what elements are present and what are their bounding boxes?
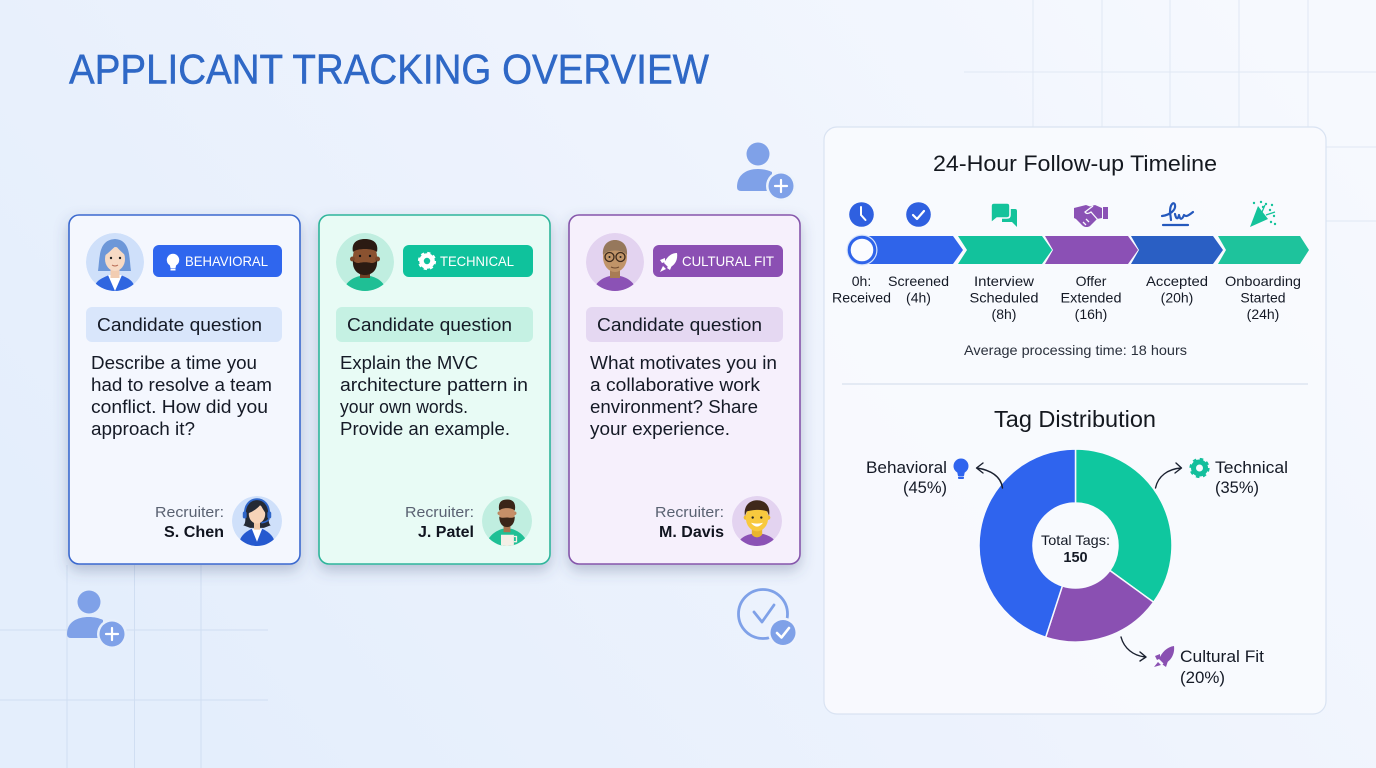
icon: check circle [738, 590, 798, 648]
title: APPLICANT TRACKING OVERVIEW [69, 46, 709, 92]
panel: technical card [319, 215, 550, 564]
tag: technical: TECHNICAL [440, 253, 514, 269]
panel: behavioral card [69, 215, 300, 564]
timeline labels: Started [1240, 290, 1286, 306]
avatar: behavioral candidate [86, 233, 144, 291]
question text: environment? Share [590, 396, 758, 417]
recruiter name: Recruiter: [405, 504, 474, 521]
timeline labels: Extended [1060, 290, 1122, 306]
timeline labels [832, 273, 1301, 322]
label: candidate question: Candidate question [597, 314, 762, 335]
question text: a collaborative work [590, 374, 761, 395]
icon: party popper [1250, 201, 1276, 227]
heading: tag distribution: Tag Distribution [994, 406, 1156, 432]
timeline labels: (8h) [992, 306, 1016, 322]
timeline labels: (16h) [1075, 306, 1107, 322]
avatar: cultural candidate [586, 233, 644, 291]
icon: bulb [167, 254, 179, 270]
tag: cultural fit [653, 245, 783, 277]
panel: right dashboard [824, 127, 1326, 714]
question text: architecture pattern in [340, 374, 528, 395]
label: cultural fit share: Cultural Fit [1180, 648, 1264, 666]
label: candidate question: Candidate question [97, 314, 262, 335]
label: candidate question [86, 307, 282, 342]
icon: add user top [737, 142, 796, 201]
donut centre total [1041, 532, 1110, 566]
timeline labels: Screened [888, 273, 949, 289]
avatar: J. Patel [482, 496, 532, 546]
heading: timeline: 24-Hour Follow-up Timeline [933, 151, 1217, 176]
timeline labels: Onboarding [1225, 273, 1301, 289]
arrow: technical [1156, 463, 1182, 488]
recruiter name: S. Chen [164, 524, 224, 541]
icon: handshake [1074, 205, 1108, 227]
recruiter name [655, 504, 724, 541]
label: candidate question: Candidate question [347, 314, 512, 335]
arrow: behavioral [976, 463, 1002, 488]
label: technical share: Technical [1215, 459, 1288, 477]
recruiter name: M. Davis [659, 524, 724, 541]
donut centre total: Total Tags: [1041, 532, 1110, 548]
timeline labels: (20h) [1161, 290, 1193, 306]
question text: your own words. [340, 396, 468, 417]
question text: your experience. [590, 418, 730, 439]
question text: had to resolve a team [91, 374, 272, 395]
label: behavioral share [866, 458, 968, 497]
label: technical share: (35%) [1215, 479, 1259, 497]
label: behavioral share: Behavioral [866, 459, 947, 477]
tag: behavioral [153, 245, 282, 277]
icon: clock [849, 202, 874, 227]
timeline labels: (4h) [906, 290, 931, 306]
donut centre total: 150 [1063, 550, 1088, 566]
timeline labels: (24h) [1247, 306, 1279, 322]
icon: signature [1162, 203, 1193, 225]
timeline arrow track [846, 234, 1309, 266]
question text: Provide an example. [340, 418, 510, 439]
arrow: cultural fit [1121, 637, 1146, 661]
question text: conflict. How did you [91, 396, 268, 417]
donut chart [979, 449, 1172, 642]
label: candidate question [336, 307, 533, 342]
question text: Explain the MVC [340, 352, 478, 373]
timeline labels: Scheduled [970, 290, 1038, 306]
question text: What motivates you in [590, 352, 777, 373]
recruiter name: J. Patel [418, 524, 474, 541]
icon: rocket [1154, 646, 1174, 667]
avatar: S. Chen [232, 496, 282, 546]
panel: cultural fit card [569, 215, 800, 564]
timeline labels: Interview [974, 273, 1035, 289]
timeline labels: 0h: [852, 273, 871, 289]
timeline labels: Received [832, 290, 891, 306]
question text: approach it? [91, 418, 195, 439]
recruiter name: Recruiter: [155, 504, 224, 521]
tag: behavioral: BEHAVIORAL [185, 253, 268, 269]
avatar: technical candidate [336, 233, 394, 291]
question text: Describe a time you [91, 352, 257, 373]
question text [91, 352, 272, 439]
label: technical share [1190, 459, 1288, 497]
recruiter name [155, 504, 224, 541]
question text [590, 352, 777, 439]
recruiter name: Recruiter: [655, 504, 724, 521]
icon: check badge [906, 202, 931, 227]
timeline labels: Accepted [1146, 273, 1208, 289]
average processing note: Average processing time: 18 hours [964, 342, 1187, 358]
label: cultural fit share [1154, 646, 1264, 687]
tag: cultural fit: CULTURAL FIT [682, 253, 774, 269]
timeline labels: Offer [1076, 273, 1107, 289]
label: candidate question [586, 307, 783, 342]
icon: rocket [660, 253, 677, 272]
tag: technical [403, 245, 533, 277]
recruiter name [405, 504, 474, 541]
icon: add user bottom [67, 590, 127, 649]
icon: gear [1190, 459, 1208, 477]
start marker [846, 234, 878, 266]
icon: bulb [954, 458, 968, 479]
icon: gear [419, 253, 435, 269]
icon: chat [991, 203, 1017, 227]
label: cultural fit share: (20%) [1180, 669, 1225, 687]
question text [340, 352, 528, 439]
avatar: M. Davis [732, 496, 782, 546]
label: behavioral share: (45%) [903, 479, 947, 497]
